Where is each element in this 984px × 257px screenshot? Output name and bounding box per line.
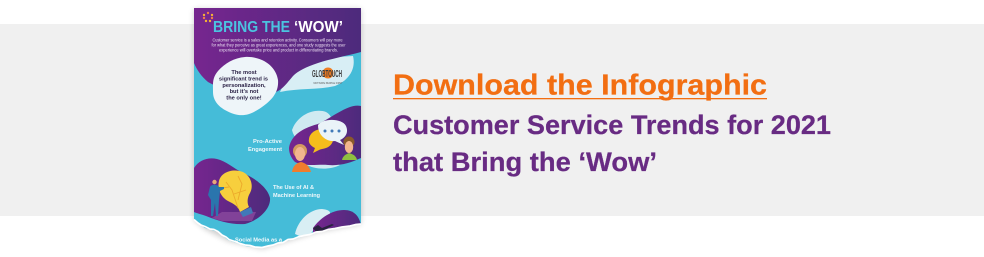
link heading: Download the Infographic: [393, 70, 767, 102]
logo: GlobalTouch: MOTIVATE PEOPLE FIRST: [314, 81, 343, 85]
icon: woman avatar: [292, 144, 311, 172]
callout text: personalization,: [222, 83, 266, 89]
torn paper edge: [194, 220, 361, 248]
purple blob: [289, 106, 361, 165]
icon: white speech bubble: [318, 120, 347, 145]
purple blob: [313, 210, 360, 232]
label: Pro-Active Engagement: [248, 139, 283, 153]
icon: small figure: [313, 224, 334, 232]
grey band: [0, 24, 984, 216]
title: Bring the Wow: ‘WOW’: [294, 19, 343, 36]
AI illustration: [194, 158, 270, 224]
poster shadow: [194, 9, 361, 249]
subheading: Customer Service Trends for 2021: [393, 110, 831, 140]
icon: sparkle burst: [203, 12, 213, 22]
pro-active engagement illustration: [289, 106, 361, 172]
label: Pro-Active Engagement: Pro-Active: [253, 139, 283, 145]
label: The Use of AI & Machine Learning: [273, 185, 320, 199]
intro text: experience will overtake price and product in differentiating brands.: [219, 48, 338, 52]
light blob: [295, 209, 330, 240]
logo blob: [280, 56, 354, 92]
poster background: [194, 52, 361, 247]
icon: yellow speech bubble: [309, 129, 333, 153]
subheading: [393, 110, 831, 177]
callout text: significant trend is: [219, 76, 268, 82]
bulb circuit lines: [222, 176, 246, 208]
panel: purple header: [194, 8, 361, 94]
callout text: [219, 70, 268, 102]
subheading: that Bring the ‘Wow’: [393, 147, 657, 177]
floor: [212, 212, 256, 221]
label: Social Media: Social Media as a: [235, 238, 283, 244]
label: The Use of AI & Machine Learning: The Use of AI &: [273, 185, 314, 191]
icon: man avatar: [342, 136, 357, 160]
light blob: [292, 111, 340, 169]
icon: light bulb: [218, 170, 252, 212]
bulb base: [240, 207, 253, 217]
title: Bring the Wow: BRING THE: [213, 19, 290, 36]
label: Pro-Active Engagement: Engagement: [248, 147, 282, 153]
intro text: Customer service is a sales and retention activity. Consumers will pay more: [212, 38, 343, 42]
callout blob: [213, 57, 278, 115]
callout text: The most: [231, 70, 257, 76]
icon: dots: [324, 130, 340, 132]
panel: infographic poster: [194, 8, 361, 248]
logo: GlobalTouch: [312, 68, 343, 85]
social media illustration: [295, 209, 360, 237]
intro text: [212, 38, 346, 52]
panel: infographic poster: GLOBTOUCH: [312, 68, 342, 80]
callout text: but it’s not: [230, 89, 259, 95]
intro text: for what they perceive as great experiences, and one study suggests the user: [212, 42, 346, 48]
purple blob: [194, 158, 270, 224]
label: The Use of AI & Machine Learning: Machine Learning: [273, 193, 320, 199]
icon: man in blue suit: [208, 180, 224, 216]
callout text: the only one!: [226, 96, 262, 102]
